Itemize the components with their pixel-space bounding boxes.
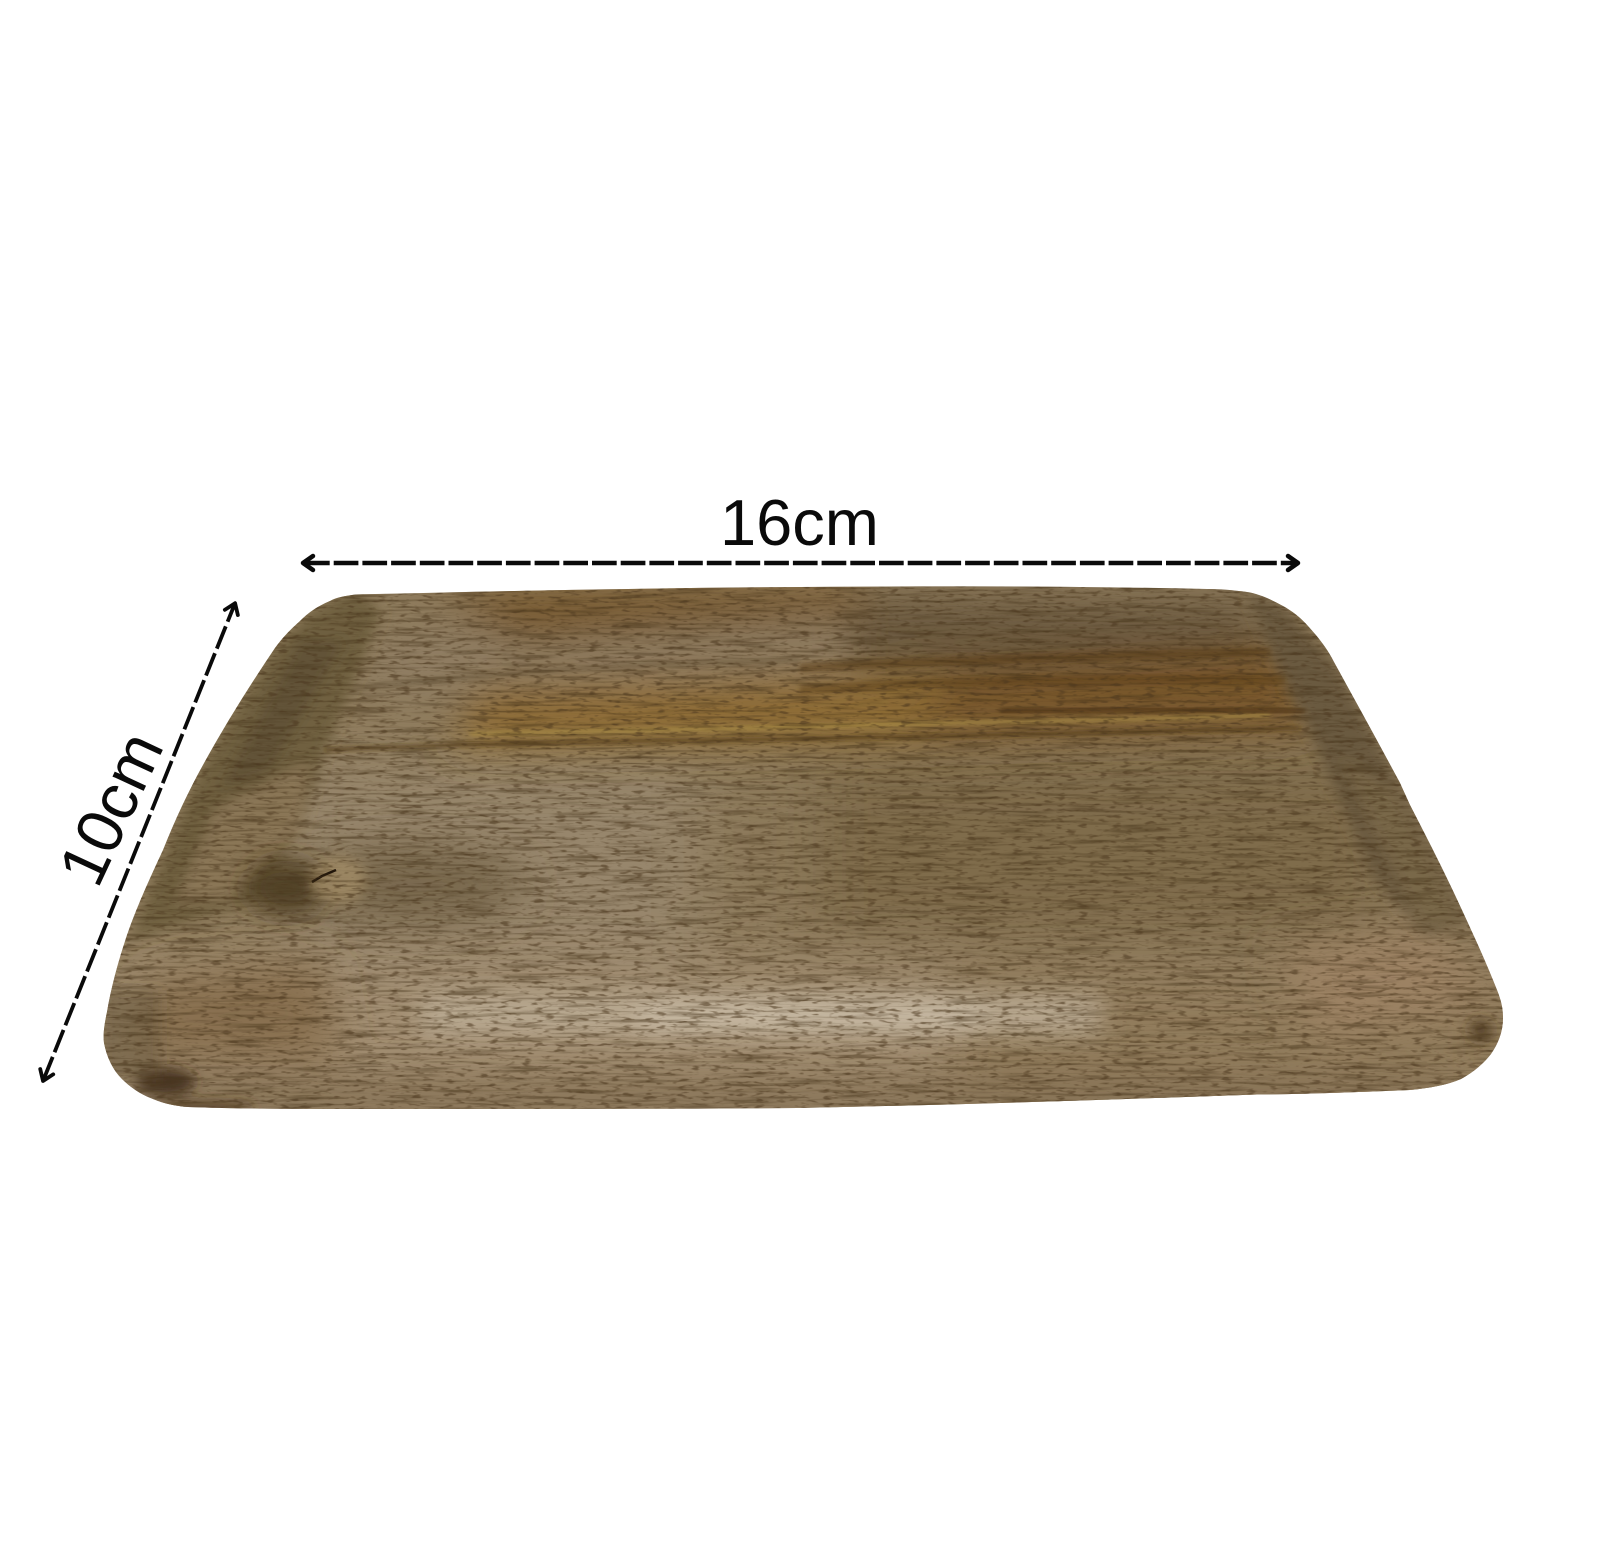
plank seams and stripes [325,652,1305,750]
infographic canvas [38,500,1503,1109]
wooden board [100,580,1510,1120]
knot [247,845,525,925]
width label: 16cm [720,486,879,559]
grain texture [100,580,1510,1115]
wood colour zones [100,580,1510,1120]
depth label: 10cm [44,721,177,896]
dark corners [100,990,1492,1113]
left bevel [130,590,382,940]
depth arrow: 10cm [37,601,242,1084]
width arrow: 16cm [303,556,1298,570]
right bevel [1247,592,1470,935]
